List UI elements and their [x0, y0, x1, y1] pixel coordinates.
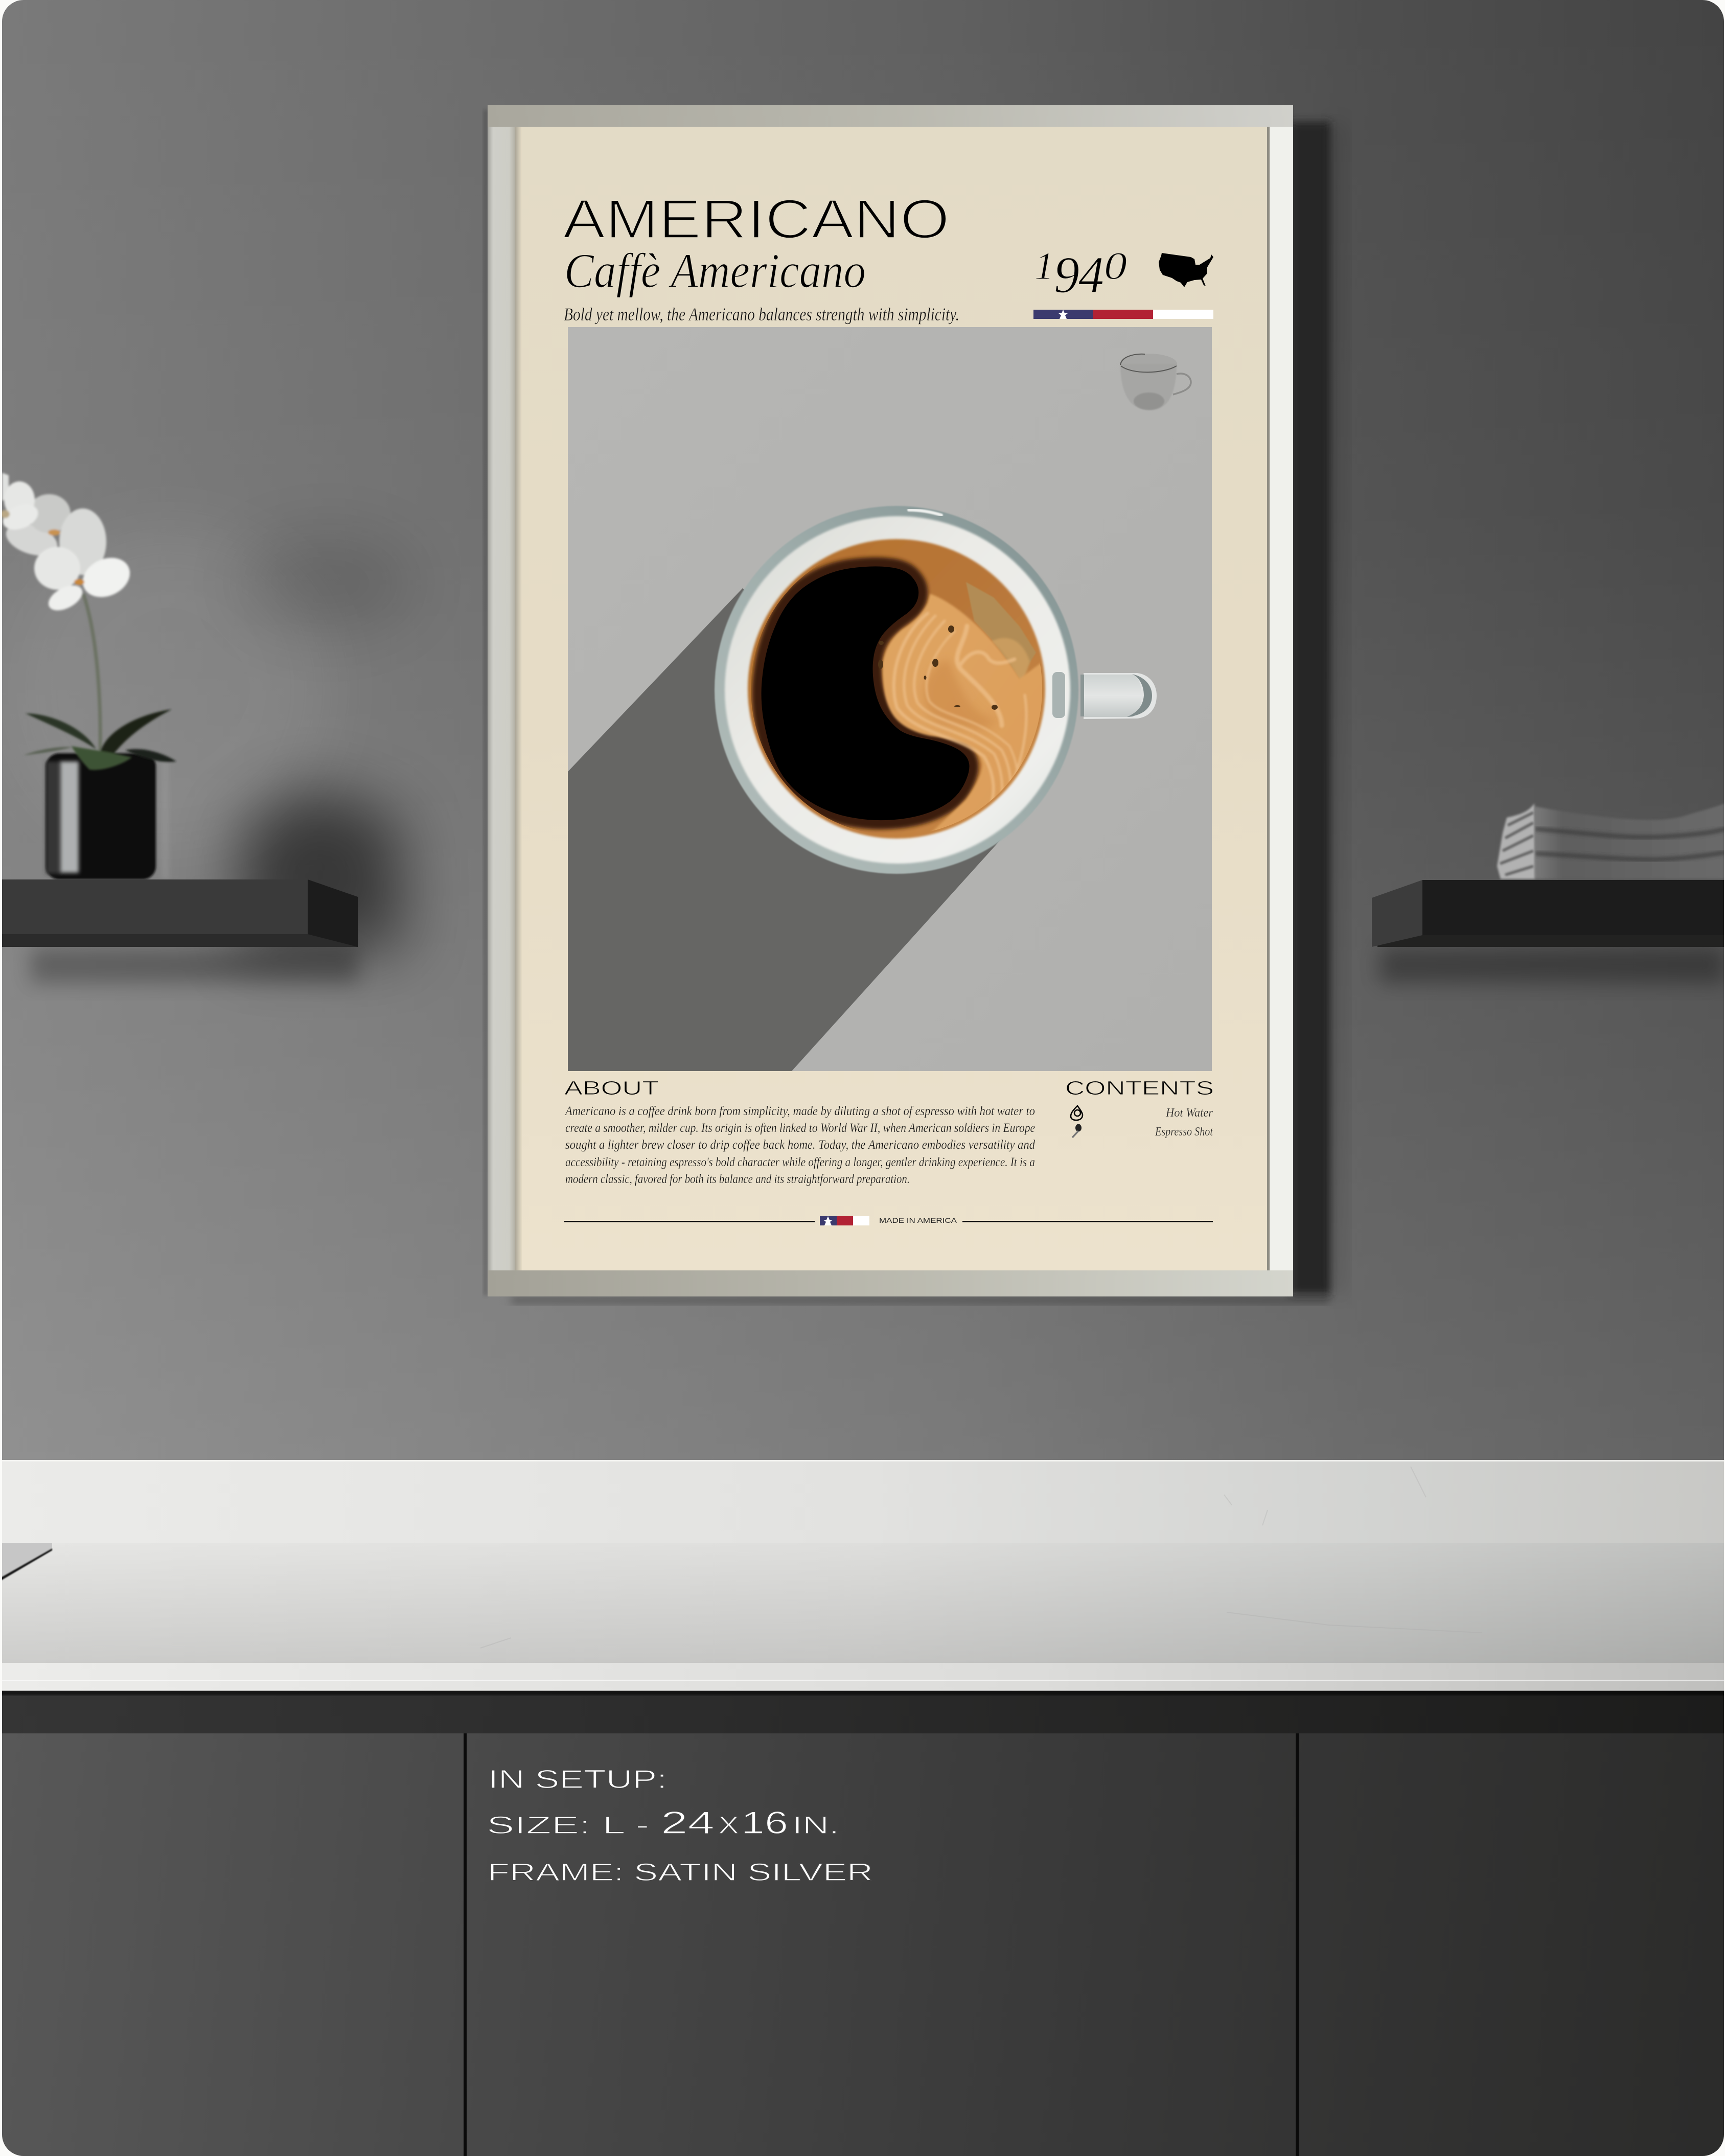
background wall: [0, 0, 1725, 1467]
cup long shadow: [568, 588, 1010, 1071]
tagline: Bold yet mellow, the Americano balances strength with simplicity.: [564, 304, 959, 324]
contents label: espresso shot: Espresso Shot: [1155, 1125, 1213, 1139]
artwork panel: [568, 327, 1212, 1071]
about paragraph: [564, 1104, 1035, 1186]
about paragraph: modern classic, favored for both its balance and its straightforward preparation.: [565, 1172, 910, 1186]
footer rule left: [564, 1221, 815, 1222]
icon: espresso spoon: [1072, 1124, 1082, 1138]
cup inner ceramic: [725, 516, 1070, 864]
setup info text: X: [718, 1812, 739, 1839]
icon: USA map: [1159, 253, 1213, 287]
year: 1: [1034, 245, 1054, 288]
flag bar: [1033, 310, 1213, 319]
year: 4: [1078, 246, 1104, 304]
about paragraph: Americano is a coffee drink born from simplicity, made by diluting a shot of espresso with hot water to: [564, 1104, 1035, 1118]
cabinet doors: [0, 1733, 1725, 2156]
icon: small glass cup: [1120, 354, 1191, 410]
right shelf with folded towels: [1372, 803, 1725, 947]
cup glass rim: [715, 506, 1078, 874]
contents label: hot water: Hot Water: [1165, 1106, 1213, 1120]
counter top: [0, 1460, 1725, 1691]
left shelf with orchid: [0, 473, 358, 947]
dark coffee rim: [762, 566, 969, 820]
footer rule right: [962, 1221, 1213, 1222]
setup info text: [487, 1765, 873, 1886]
title: AMERICANO: [563, 188, 950, 250]
setup info text: SIZE: L -: [487, 1812, 661, 1839]
setup info text: 24: [661, 1805, 715, 1841]
shelf board: [1372, 880, 1725, 947]
setup info text: FRAME: SATIN SILVER: [488, 1859, 873, 1886]
coffee specks: [878, 625, 998, 710]
cabinet band: [0, 1691, 1725, 1733]
foam darker patches: [924, 659, 997, 729]
icon: orchid flowers: [0, 473, 136, 616]
coffee surface: [748, 539, 1053, 839]
setup info text: IN SETUP:: [488, 1765, 667, 1794]
poster paper: [515, 127, 1267, 1270]
about paragraph: create a smoother, milder cup. Its origin is often linked to World War II, when American soldiers in Europe: [565, 1121, 1035, 1135]
about paragraph: accessibility - retaining espresso's bold character while offering a longer, gentler drinking experience. It is a: [565, 1155, 1035, 1169]
icon: orchid stem: [83, 594, 100, 751]
icon: coffee cup top view: [715, 506, 1157, 874]
subtitle: Caffè Americano: [564, 243, 866, 298]
icon: folded towels: [1497, 803, 1725, 879]
black coffee: [762, 566, 969, 820]
crema tan patches: [966, 582, 1036, 679]
footer flag: [820, 1216, 869, 1225]
cup handle: [1080, 673, 1157, 719]
about paragraph: sought a lighter brew closer to drip coffee back home. Today, the Americano embodies versatility and: [565, 1138, 1035, 1152]
shelf board: [2, 879, 358, 947]
contents heading: CONTENTS: [1065, 1078, 1214, 1099]
setup info text: 16: [741, 1805, 788, 1841]
icon: orchid pot: [46, 753, 169, 879]
about heading: ABOUT: [564, 1078, 659, 1099]
icon: orchid leaves: [24, 709, 176, 770]
foam swirl: [883, 594, 1053, 838]
setup info text: IN.: [792, 1812, 839, 1839]
icon: tablet corner on counter: [0, 1543, 52, 1581]
year: 0: [1104, 245, 1127, 288]
poster frame: [488, 105, 1293, 1296]
frame drop shadow: [484, 110, 1344, 1304]
year: 9: [1054, 246, 1079, 304]
foam light streaks: [894, 613, 1026, 818]
icon: hot water drop: [1071, 1106, 1083, 1120]
footer made in america label: MADE IN AMERICA: [879, 1216, 957, 1224]
